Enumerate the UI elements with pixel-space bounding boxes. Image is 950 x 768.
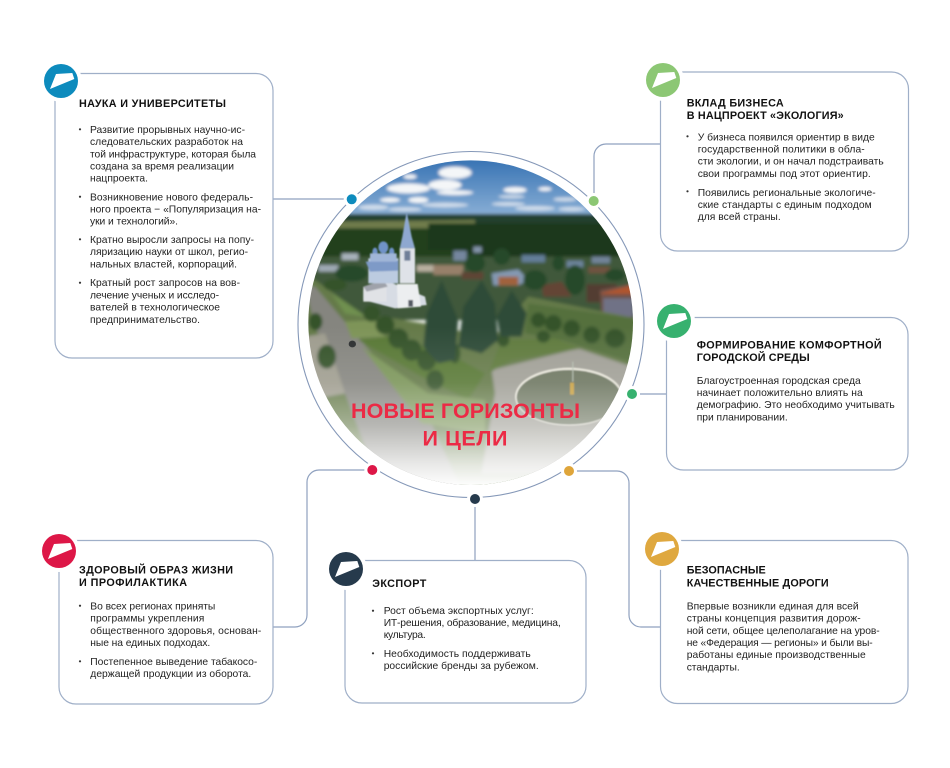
- bullet list: Рост объема экспортных услуг:: [384, 605, 534, 617]
- heading: КАЧЕСТВЕННЫЕ ДОРОГИ: [687, 577, 829, 589]
- plaza: [482, 348, 632, 473]
- bullet list: той инфраструктуре, которая была: [90, 148, 256, 160]
- heading: ГОРОДСКОЙ СРЕДЫ: [697, 351, 810, 364]
- text block: Впервые возникли единая для всей: [687, 601, 859, 612]
- central title: НОВЫЕ ГОРИЗОНТЫ: [351, 399, 580, 423]
- text block: Благоустроенная городская среда: [697, 376, 861, 387]
- icon: urban environment: [653, 300, 695, 342]
- bullet list: уки и технологий».: [90, 216, 178, 228]
- connector dot: green: [624, 386, 640, 402]
- ground: [308, 279, 629, 485]
- panel: safe quality roads: [641, 528, 908, 704]
- bullet list: Кратно выросли запросы на попу-: [90, 235, 254, 246]
- heading: ЭКСПОРТ: [372, 578, 427, 590]
- houses: [318, 247, 633, 320]
- outer ring: [298, 152, 644, 498]
- icon: export: [325, 548, 367, 590]
- bullet list: держащей продукции из оборота.: [90, 668, 251, 680]
- panel: comfortable urban environment: [653, 300, 908, 470]
- bullet list: сти экологии, и он начал подстраивать: [698, 156, 884, 168]
- car: [349, 341, 356, 347]
- connector dot: red: [364, 462, 380, 478]
- heading: [697, 338, 882, 364]
- connector dot: gold: [561, 463, 577, 479]
- bullet list: лечение ученых и исследо-: [90, 290, 219, 301]
- connector dot: light green: [586, 193, 602, 209]
- bullet list: программы укрепления: [90, 614, 204, 624]
- bullet list: Появились региональные экологиче-: [698, 188, 876, 199]
- bullet list: [79, 601, 261, 680]
- heading: НАУКА И УНИВЕРСИТЕТЫ: [79, 98, 226, 110]
- bullet list: Кратный рост запросов на вов-: [90, 278, 240, 289]
- bullet list: [79, 125, 261, 326]
- bullet list: свои программы под этот ориентир.: [698, 169, 871, 180]
- bullet list: ные на единых подходах.: [90, 638, 210, 649]
- bottom fade: [314, 346, 631, 485]
- icon: health: [38, 530, 80, 572]
- central title: [351, 399, 580, 450]
- bullet list: [372, 605, 561, 672]
- bullet list: ляризацию науки от школ, регио-: [90, 247, 248, 258]
- bullet list: государственной политики в обла-: [698, 144, 865, 156]
- connector lines: [272, 144, 667, 627]
- bullet list: ские стандарты с единым подходом: [698, 200, 872, 211]
- text block: при планировании.: [697, 412, 788, 424]
- bullet list: Во всех регионах приняты: [90, 601, 215, 612]
- bullet list: Развитие прорывных научно-ис-: [90, 125, 245, 136]
- text block: стандарты.: [687, 662, 740, 674]
- central circle with photo: [295, 152, 645, 498]
- bullet list: Возникновение нового федераль-: [90, 191, 253, 203]
- heading: ВКЛАД БИЗНЕСА: [687, 98, 784, 110]
- heading: БЕЗОПАСНЫЕ: [687, 564, 766, 576]
- bullet list: нальных властей, корпораций.: [90, 260, 237, 270]
- text block: демографию. Это необходимо учитывать: [697, 399, 895, 411]
- church: [363, 212, 427, 308]
- panel: science and universities: [40, 60, 273, 358]
- text block: [687, 601, 880, 674]
- panel: business contribution to ecology: [642, 59, 908, 251]
- connector dot: blue: [344, 191, 360, 207]
- text block: не «Федерация — регионы» и были вы-: [687, 637, 873, 649]
- heading: ЗДОРОВЫЙ ОБРАЗ ЖИЗНИ: [79, 564, 233, 576]
- bullet list: следовательских разработок на: [90, 136, 243, 148]
- text block: работаны единые производственные: [687, 649, 866, 661]
- bullet list: вателей в технологическое: [90, 302, 220, 314]
- bullet list: У бизнеса появился ориентир в виде: [698, 132, 875, 144]
- central title: И ЦЕЛИ: [422, 426, 508, 450]
- bullet list: нацпроекта.: [90, 174, 148, 185]
- heading: [687, 98, 844, 122]
- bullet list: Постепенное выведение табакосо-: [90, 656, 257, 668]
- icon: roads: [641, 528, 683, 570]
- bullet list: общественного здоровья, основан-: [90, 625, 261, 637]
- bullet list: ного проекта − «Популяризация на-: [90, 204, 261, 215]
- heading: В НАЦПРОЕКТ «ЭКОЛОГИЯ»: [687, 110, 844, 122]
- bullet list: [686, 132, 884, 223]
- heading: ФОРМИРОВАНИЕ КОМФОРТНОЙ: [697, 338, 882, 352]
- text block: начинает положительно влиять на: [697, 388, 863, 399]
- panel: healthy lifestyle: [38, 530, 273, 704]
- bullet list: создана за время реализации: [90, 162, 234, 172]
- road: [305, 287, 462, 490]
- bullet list: предпринимательство.: [90, 315, 200, 326]
- bullet list: ИТ-решения, образование, медицина,: [384, 617, 561, 629]
- text block: ной сети, общее целеполагание на уров-: [687, 625, 880, 637]
- trees: [309, 279, 625, 390]
- fountain: [515, 362, 623, 426]
- text block: [697, 376, 895, 424]
- heading: [687, 564, 829, 589]
- bullet list: для всей страны.: [698, 212, 781, 223]
- bullet list: Необходимость поддерживать: [384, 648, 531, 660]
- bullet list: российские бренды за рубежом.: [384, 660, 539, 672]
- text block: страны концепция развития дорож-: [687, 614, 861, 624]
- bullet list: культура.: [384, 630, 426, 641]
- icon: ecology: [642, 59, 684, 101]
- heading: И ПРОФИЛАКТИКА: [79, 577, 187, 589]
- icon: science: [40, 60, 82, 102]
- panel: export: [325, 548, 586, 703]
- heading: [79, 564, 233, 589]
- photo: aerial view of town with church and fountain: [308, 160, 633, 485]
- connector dot: navy: [467, 491, 483, 507]
